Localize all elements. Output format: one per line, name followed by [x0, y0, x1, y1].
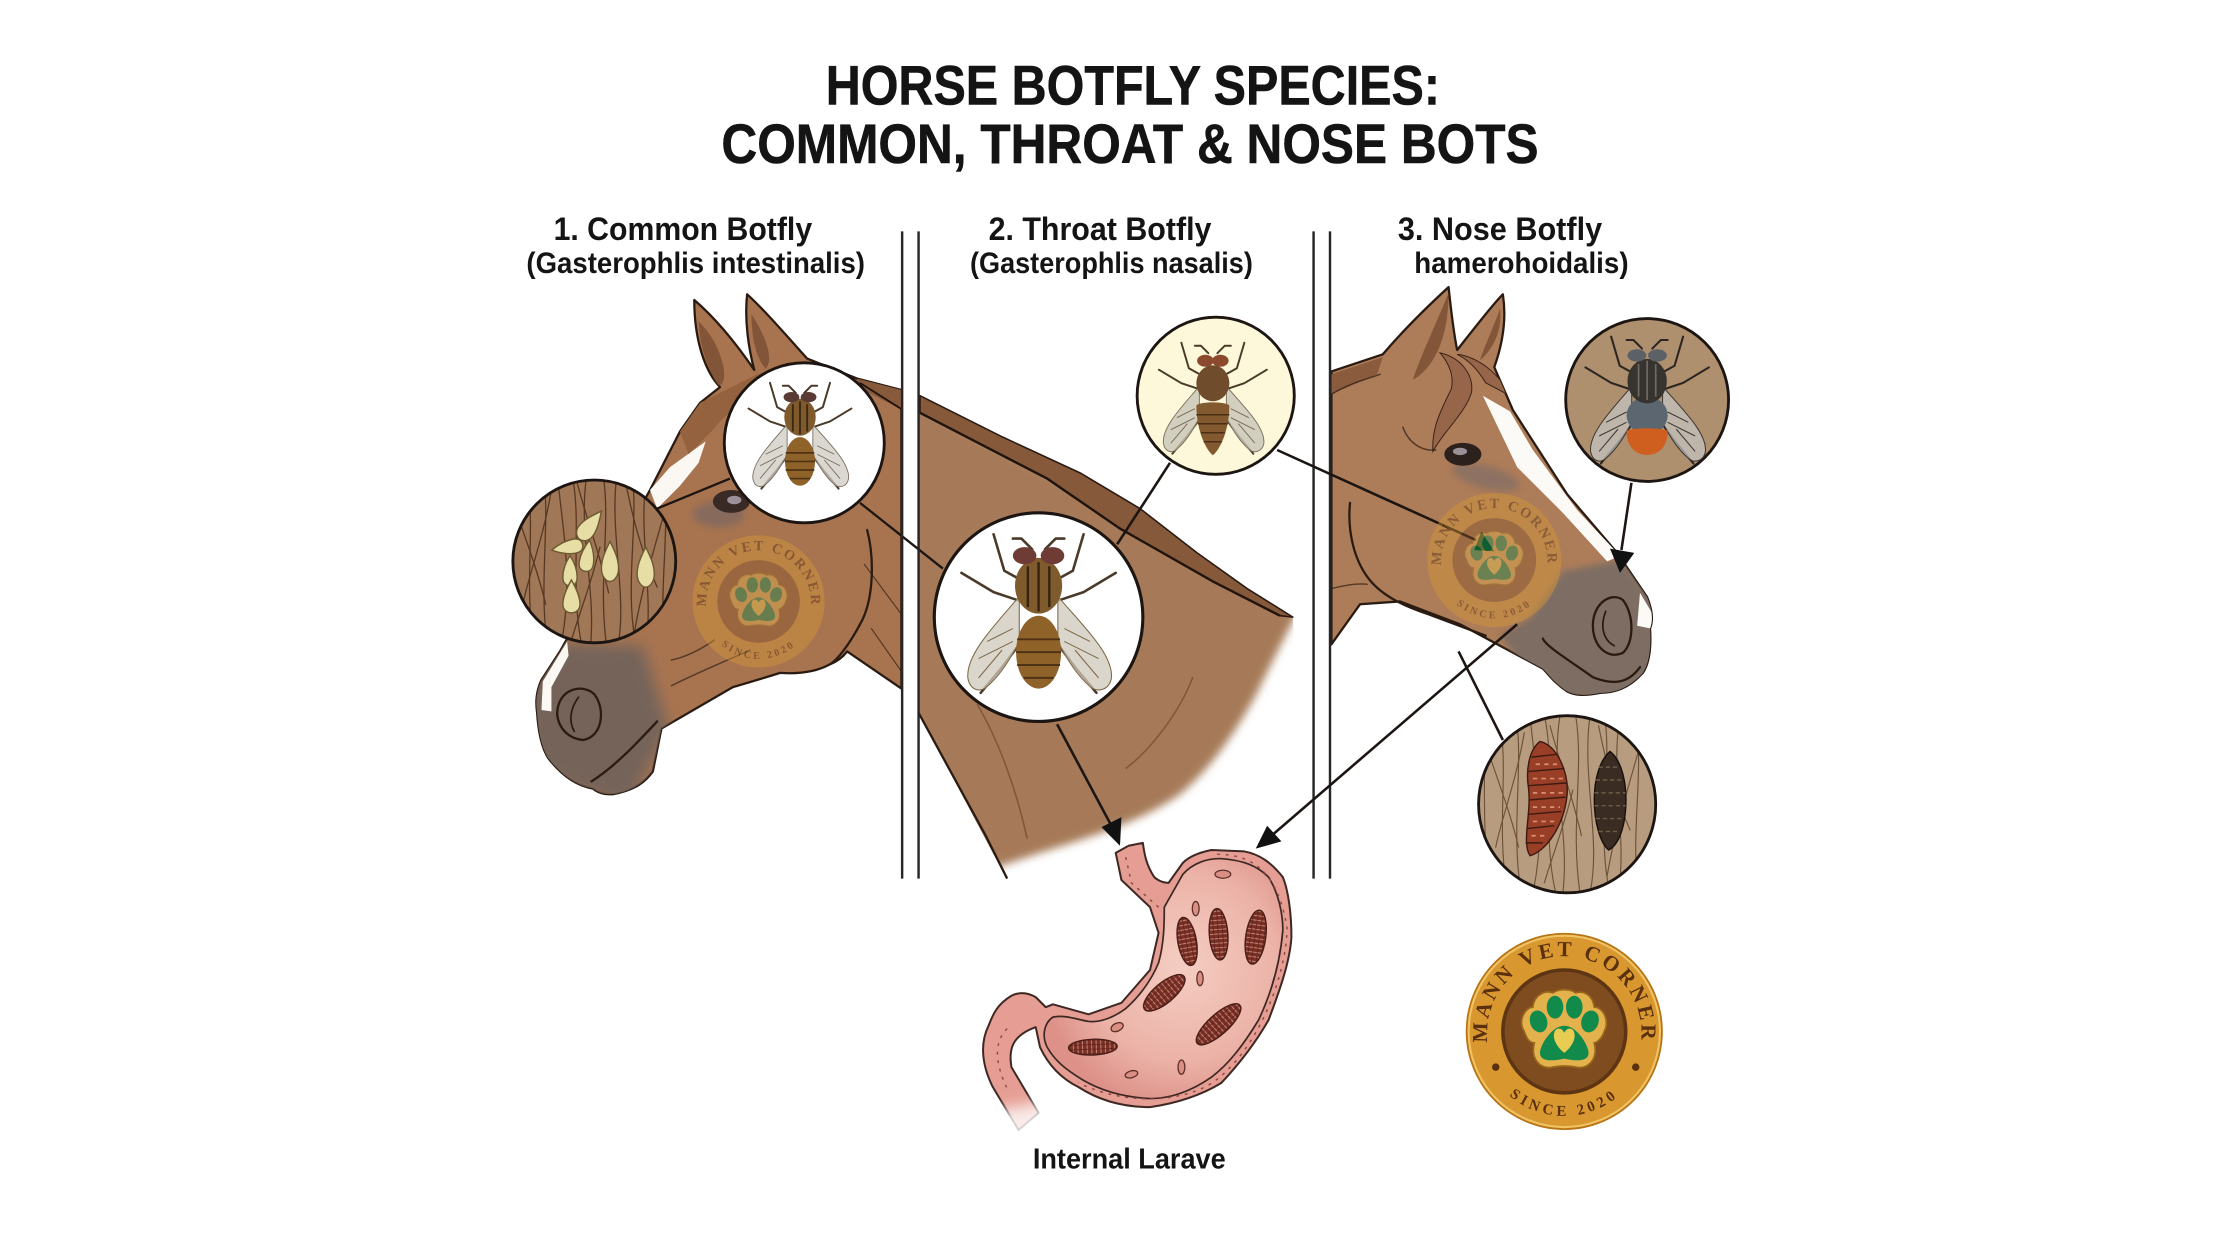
arrow: cream fly to nose head [1277, 450, 1494, 551]
arrow: nose fly circle to muzzle [1610, 483, 1634, 573]
intestine fade [993, 1100, 1050, 1143]
eggs [550, 506, 654, 613]
heading: nose botfly [1398, 210, 1629, 280]
circle: nose botfly larvae on hair [1479, 716, 1656, 893]
left eye [713, 490, 750, 513]
eye socket shading [693, 501, 744, 527]
heading: throat botfly [970, 210, 1253, 280]
stomach illustration [983, 843, 1291, 1143]
divider lines [902, 231, 1330, 879]
stomach larvae [1068, 908, 1269, 1056]
eye socket shading [1452, 462, 1520, 493]
watermark seal left [692, 536, 824, 668]
red larva [1526, 741, 1567, 856]
panel: nose botfly horse head [1331, 287, 1664, 707]
watermark seal right [1428, 493, 1562, 627]
heading: common botfly [526, 210, 865, 280]
logo medallion: SINCE 2020 [1510, 1089, 1614, 1116]
stomach small ovals [1110, 870, 1231, 1079]
heading: common botfly: 1. Common Botfly [554, 210, 813, 247]
muzzle shading [536, 638, 674, 794]
arrow: head to stomach [1256, 624, 1517, 849]
nostril and jaw lines [557, 530, 901, 781]
circle: eggs on hair [509, 473, 676, 650]
forelock [1433, 353, 1510, 451]
white blaze [1483, 396, 1653, 629]
ear inner shading [1413, 293, 1500, 380]
title [721, 54, 1539, 175]
nostril and cheek lines [1331, 374, 1640, 682]
title: HORSE BOTFLY SPECIES: [826, 54, 1440, 116]
title: COMMON, THROAT & NOSE BOTS [721, 113, 1539, 175]
forelock [680, 360, 809, 454]
arrow: cream fly circle to neck [1117, 463, 1170, 544]
arrow: larvae circle to head [1459, 651, 1503, 740]
white blaze [541, 441, 706, 711]
panel: common botfly horse head [521, 294, 943, 807]
heading: throat botfly: 2. Throat Botfly [989, 210, 1212, 247]
panel: throat botfly neck [920, 394, 1294, 880]
circle: throat botfly cream [1137, 317, 1294, 474]
left connector lines [657, 479, 943, 569]
heading: nose botfly: hamerohoidalis) [1414, 247, 1629, 280]
arrow: large fly circle to esophagus [1057, 724, 1121, 846]
heading: common botfly: (Gasterophlis intestinalis) [526, 247, 865, 280]
caption: internal larvae: Internal Larave [1033, 1144, 1226, 1176]
heading: throat botfly: (Gasterophlis nasalis) [970, 247, 1253, 280]
logo medallion [1466, 932, 1663, 1130]
heading: nose botfly: 3. Nose Botfly [1398, 210, 1603, 247]
circle: throat botfly large adult [934, 513, 1143, 721]
circle: common botfly adult [724, 363, 884, 523]
circle: nose botfly adult [1566, 319, 1729, 481]
ear inner shading [699, 314, 769, 386]
logo medallion: MANN VET CORNER [1472, 942, 1656, 1042]
dark larva [1594, 751, 1626, 850]
muzzle shading [1499, 558, 1652, 695]
watermark seal left: SINCE 2020 [722, 640, 792, 659]
watermark seal right: SINCE 2020 [1457, 600, 1529, 618]
watermark seal left: MANN VET CORNER [696, 540, 820, 606]
right eye [1444, 443, 1481, 466]
watermark seal right: MANN VET CORNER [1431, 498, 1557, 566]
